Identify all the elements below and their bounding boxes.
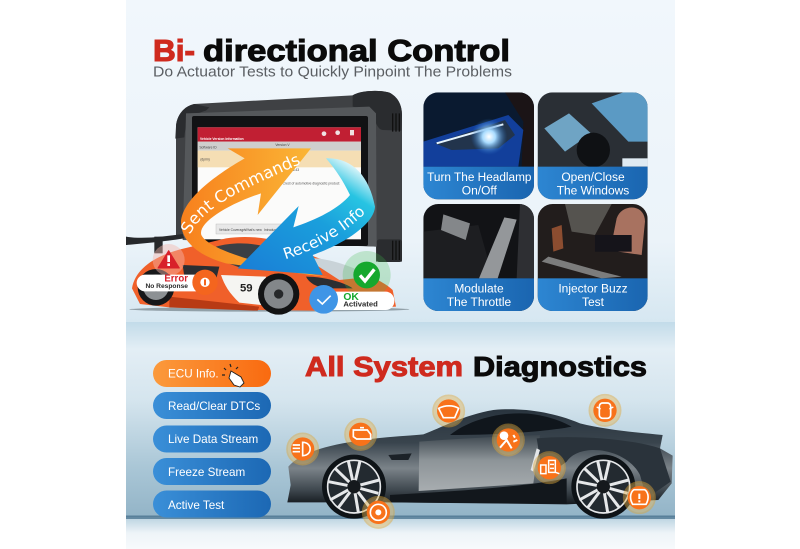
icon: headlight: [287, 433, 318, 465]
tile: injector: Test: [582, 295, 605, 309]
tile: windows: [538, 92, 648, 199]
title: Bi-directional Control: directional Control: [203, 33, 510, 68]
title: Bi-directional Control: Bi-: [153, 33, 195, 68]
button: Read/Clear DTCs: [153, 392, 271, 419]
icon: airbag: [493, 424, 524, 456]
heading: All System Diagnostics: All System: [305, 351, 463, 382]
function buttons: [153, 360, 271, 518]
heading: All System Diagnostics: [305, 351, 647, 382]
button: Live Data Stream: Live Data Stream: [168, 433, 258, 446]
tablet with arrows and race car: [126, 90, 410, 315]
ok activated: Activated: [343, 300, 378, 309]
tablet screen: Crest of automotive diagnostic product: [283, 181, 340, 185]
button: Freeze Stream: [153, 458, 271, 485]
front wheel: [322, 455, 386, 519]
tablet screen: Introduc: [264, 228, 276, 232]
button: ECU Info: [153, 360, 271, 387]
tile: headlamp: On/Off: [462, 183, 498, 197]
icon: brake disc: [363, 497, 394, 528]
rear wheel: [571, 455, 635, 519]
button: Active Test: [153, 490, 271, 518]
tablet screen: Software ID: [199, 146, 217, 150]
ok activated: [309, 251, 394, 314]
tablet screen: Version V: [275, 143, 290, 147]
arrow: sent commands: [181, 148, 329, 278]
arrow: receive info: [238, 158, 375, 275]
tablet screen: (dpim): [200, 157, 210, 161]
error warning: Error: [164, 274, 188, 285]
arrow: receive info: Receive Info: [283, 208, 364, 259]
icon: transmission: [534, 452, 565, 483]
icon: tire pressure: [624, 482, 655, 513]
tile: throttle: The Throttle: [447, 295, 512, 309]
tile: windows: Open/Close: [561, 170, 625, 184]
car body: [287, 409, 673, 504]
feature tiles: [423, 92, 648, 311]
button: ECU Info: ECU Info.: [168, 368, 219, 380]
icon: windshield: [433, 395, 464, 427]
tablet screen: Vehicle Version Information: [200, 137, 244, 141]
tile: headlamp: [423, 92, 534, 199]
race car: [126, 234, 409, 315]
button: Freeze Stream: Freeze Stream: [168, 466, 245, 479]
error warning: [137, 244, 218, 295]
background panel: [126, 0, 675, 549]
button: Live Data Stream: [153, 426, 271, 452]
ok activated: OK: [343, 292, 359, 303]
tablet screen: What's new: [245, 228, 262, 232]
button: Active Test: Active Test: [168, 499, 225, 512]
tile: injector: Injector Buzz: [558, 282, 628, 296]
tile: injector: [538, 204, 648, 311]
icon: engine: [345, 419, 376, 450]
tablet screen: Vehicle Coverage: [219, 228, 245, 232]
tablet device: [175, 91, 402, 262]
tablet screen: 5.43: [293, 168, 299, 172]
tile: windows: The Windows: [557, 183, 629, 197]
sports car with system icons: [287, 395, 673, 528]
heading: All System Diagnostics: Diagnostics: [473, 351, 647, 382]
subtitle: Do Actuator Tests to Quickly Pinpoint The Problems: [153, 64, 512, 80]
error warning: No Response: [145, 283, 188, 290]
icon: car door: [589, 395, 621, 426]
race car: 59: [240, 283, 253, 295]
tile: throttle: [423, 204, 534, 311]
tile: headlamp: Turn The Headlamp: [427, 170, 532, 184]
arrow: sent commands: Sent Commands: [181, 156, 300, 234]
tablet screen: [198, 127, 361, 239]
button: Read/Clear DTCs: Read/Clear DTCs: [168, 400, 260, 413]
tile: throttle: Modulate: [454, 282, 504, 296]
